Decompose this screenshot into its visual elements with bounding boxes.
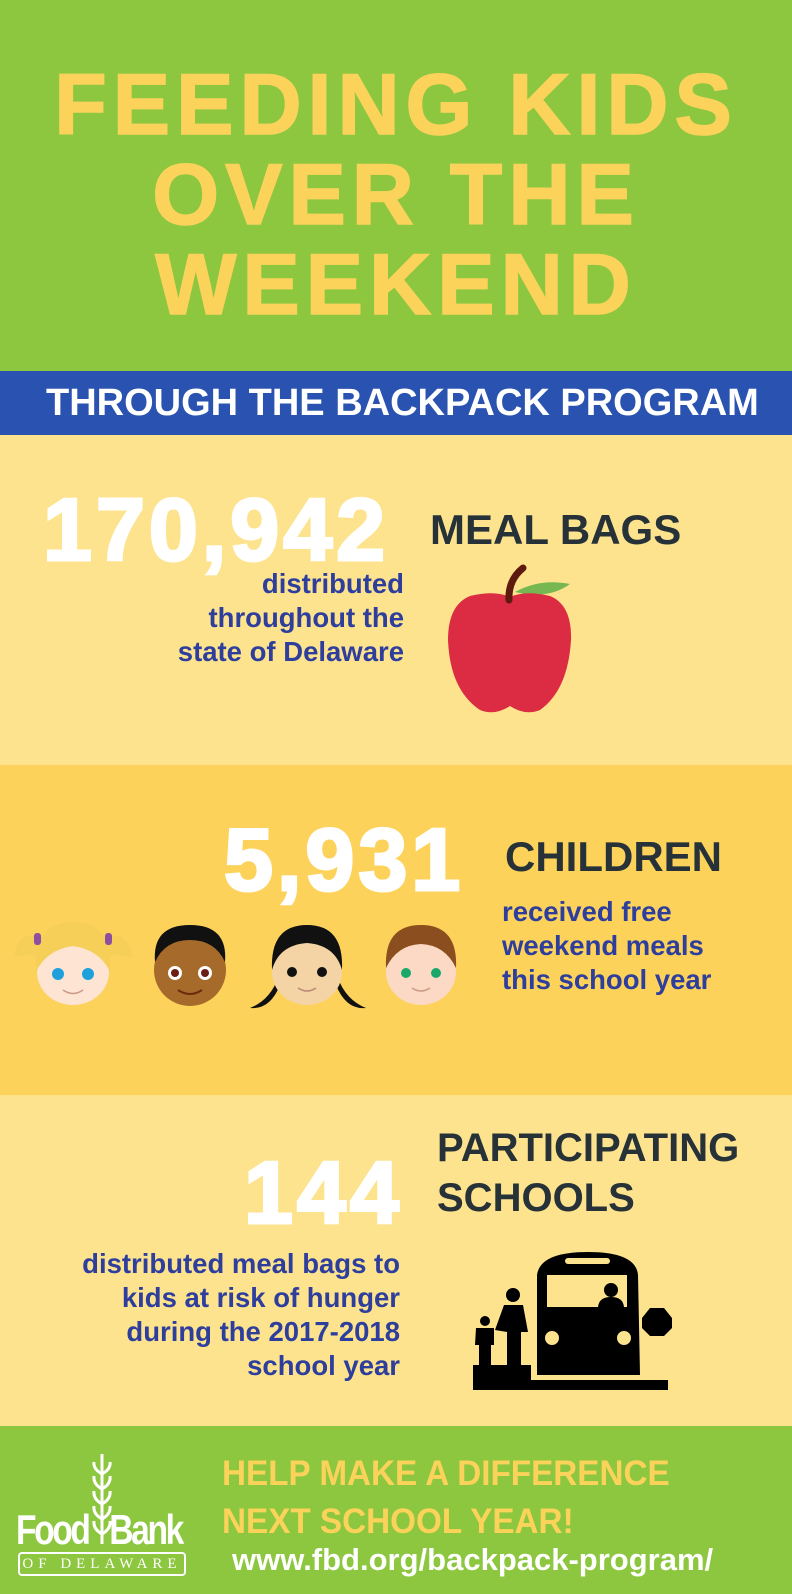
description: received free: [502, 896, 672, 927]
title: WEEKEND: [155, 237, 637, 333]
description: distributed meal bags to: [82, 1248, 400, 1279]
description: state of Delaware: [178, 636, 404, 667]
title: FEEDING KIDS: [54, 57, 738, 153]
logo: food bank of delaware: OF DELAWARE: [22, 1556, 182, 1572]
heading participating schools: SCHOOLS: [437, 1176, 635, 1220]
icon: apple: [448, 564, 572, 712]
call to action: HELP MAKE A DIFFERENCE: [222, 1454, 670, 1493]
description: throughout the: [208, 602, 404, 633]
icon: children faces: [34, 925, 456, 1008]
call to action: [222, 1454, 670, 1541]
description: during the 2017-2018: [126, 1316, 400, 1347]
description: kids at risk of hunger: [122, 1282, 400, 1313]
description: school year: [247, 1350, 400, 1381]
panel: children: [0, 765, 792, 1095]
heading children: CHILDREN: [505, 833, 722, 880]
heading participating schools: [437, 1126, 739, 1220]
logo: food bank of delaware: Food Bank: [16, 1506, 182, 1553]
subtitle band: [0, 371, 792, 435]
description: weekend meals: [502, 930, 704, 961]
boy dark: [154, 925, 226, 1006]
number 144: 144: [244, 1143, 403, 1242]
subtitle band: THROUGH THE BACKPACK PROGRAM: [46, 382, 759, 424]
heading participating schools: PARTICIPATING: [437, 1126, 739, 1170]
url: www.fbd.org/backpack-program/: [232, 1542, 713, 1577]
header panel: [0, 0, 792, 371]
number 5,931: 5,931: [224, 810, 464, 909]
description: distributed: [262, 568, 404, 599]
girl black hair: [250, 925, 366, 1008]
logo: food bank of delaware: [16, 1454, 186, 1576]
panel: schools: [0, 1095, 792, 1426]
title: OVER THE: [152, 147, 640, 243]
icon: bus stop: [473, 1252, 672, 1390]
girl blonde: [13, 922, 133, 1005]
call to action: NEXT SCHOOL YEAR!: [222, 1502, 574, 1541]
panel: meal bags: [0, 435, 792, 765]
title: [54, 57, 738, 333]
boy brown hair: [386, 925, 456, 1005]
description: [178, 568, 404, 667]
number 170,942: 170,942: [43, 480, 389, 579]
description: [82, 1248, 400, 1381]
footer panel: [0, 1426, 792, 1594]
description: [502, 896, 711, 995]
description: this school year: [502, 964, 711, 995]
heading meal bags: MEAL BAGS: [430, 506, 681, 553]
